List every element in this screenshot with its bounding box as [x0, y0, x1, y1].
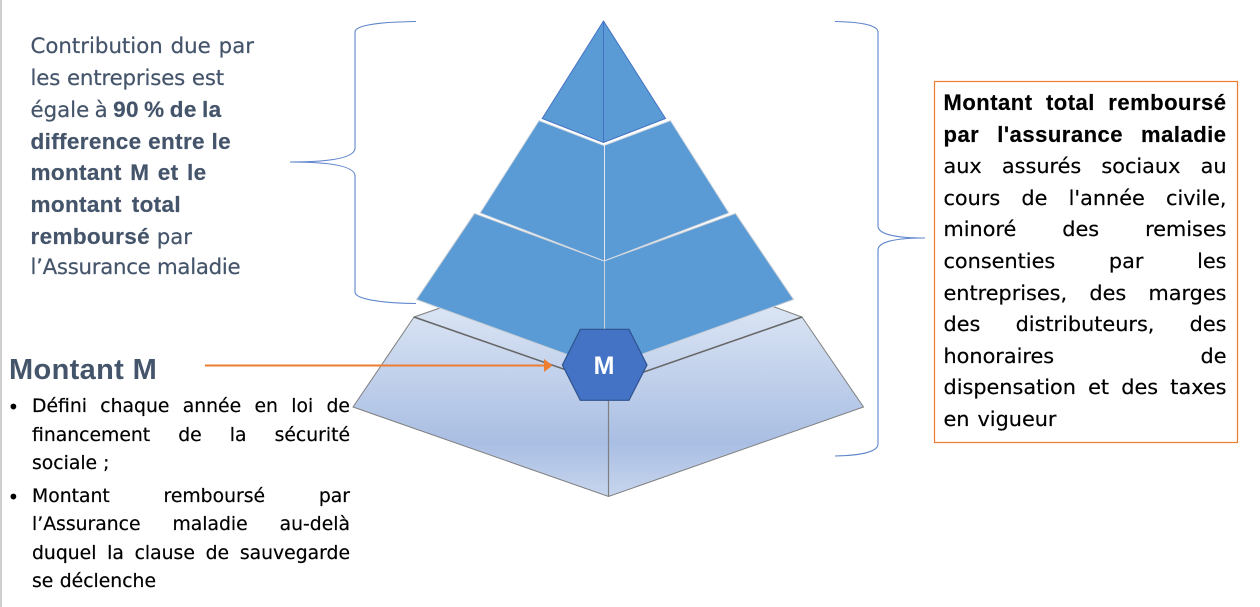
- text box: montant total remboursé: par l'assurance maladie: [944, 122, 1226, 147]
- pyramid base tier: [353, 250, 864, 496]
- pyramid middle blue tier: [480, 120, 729, 261]
- text box: montant total remboursé: minoré des remises: [944, 217, 1226, 241]
- bullet list: Montant M: Défini chaque année en loi de: [32, 396, 350, 417]
- orange box outline: [934, 82, 1238, 442]
- bullet list: Montant M: financement de la sécurité: [32, 425, 350, 446]
- hexagon M: [562, 329, 647, 400]
- text block: contribution: égale à 90 % de la: [30, 97, 221, 123]
- bullet list: Montant M: duquel la clause de sauvegarde: [32, 543, 350, 564]
- text block: contribution: remboursé par: [30, 224, 192, 250]
- bullet list: Montant M: l’Assurance maladie au-delà: [32, 514, 350, 535]
- hexagon M: M: [594, 352, 614, 380]
- bullet list: Montant M: se déclenche: [32, 571, 156, 592]
- text box: montant total remboursé: aux assurés sociaux au: [944, 154, 1226, 178]
- text block: contribution: montant M et le: [30, 160, 206, 185]
- pyramid top blue tier: [542, 21, 666, 142]
- text box: montant total remboursé: honoraires de: [944, 344, 1226, 368]
- bullet list: Montant M: •: [8, 395, 19, 419]
- left brace: [290, 22, 416, 304]
- pyramid lower blue tier: [416, 214, 794, 368]
- text block: contribution: l’Assurance maladie: [30, 255, 240, 280]
- text box: montant total remboursé: consenties par les: [944, 249, 1226, 273]
- text block: contribution: Contribution due par: [30, 34, 254, 59]
- bullet list: Montant M: Montant remboursé par: [32, 486, 350, 507]
- text box: montant total remboursé: [944, 90, 1226, 431]
- bullet list: Montant M: sociale ;: [32, 453, 109, 474]
- text block: contribution: montant total: [30, 192, 181, 217]
- text box: montant total remboursé: dispensation et des taxes: [944, 375, 1226, 399]
- text box: montant total remboursé: des distributeurs, des: [944, 312, 1226, 336]
- bullet list: Montant M: [8, 395, 350, 592]
- text box: montant total remboursé: Montant total remboursé: [944, 90, 1226, 115]
- text block: contribution: [30, 34, 254, 280]
- text box: montant total remboursé: cours de l'année civile,: [944, 186, 1226, 210]
- text box: montant total remboursé: en vigueur: [944, 407, 1056, 431]
- text block: contribution: difference entre le: [30, 129, 231, 154]
- text box: montant total remboursé: entreprises, des marges: [944, 281, 1226, 305]
- orange arrow: [205, 359, 552, 372]
- bullet list: Montant M: •: [8, 485, 19, 509]
- right brace: [835, 22, 925, 456]
- heading: Montant M: Montant M: [9, 354, 157, 386]
- text block: contribution: les entreprises est: [30, 66, 224, 91]
